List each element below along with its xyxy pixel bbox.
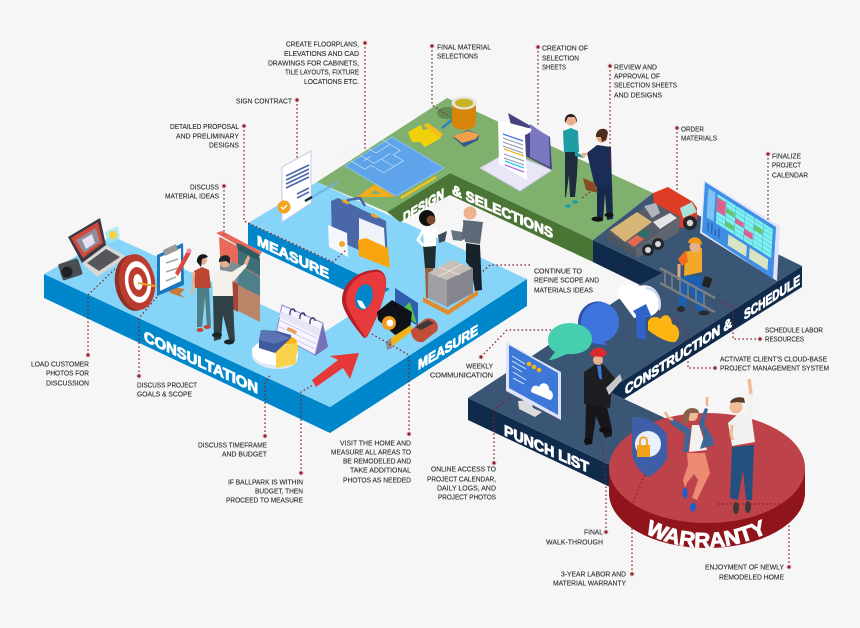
icon: briefcase with folder bbox=[328, 198, 390, 268]
label: review and approval: AND DESIGNS bbox=[614, 90, 662, 100]
people: designer and client bbox=[418, 206, 483, 298]
platform: design and selections bbox=[317, 98, 653, 262]
label: schedule labor bbox=[765, 326, 823, 344]
icon: red arrow bbox=[312, 353, 359, 387]
dotted leader lines bbox=[86, 41, 791, 576]
label: detailed proposal bbox=[170, 122, 239, 150]
label: create floorplans: ELEVATIONS AND CAD bbox=[284, 49, 359, 58]
label: weekly communication bbox=[430, 362, 493, 380]
icon: cloud with upload arrow bbox=[617, 284, 679, 342]
label: online access: PROJECT CALENDAR, bbox=[427, 474, 496, 484]
label: visit the home bbox=[331, 439, 411, 484]
label: labor and material warranty: 3-YEAR LABOR AND bbox=[561, 570, 626, 579]
label: discuss material ideas: MATERIAL IDEAS bbox=[165, 192, 219, 201]
heading: measure (lower): MEASURE bbox=[418, 322, 478, 374]
people: handshake bbox=[563, 114, 614, 222]
label: discuss material ideas: DISCUSS bbox=[190, 183, 219, 192]
people: worker with ladder bbox=[660, 237, 715, 315]
icon: camera, photo and tape measure bbox=[377, 288, 438, 350]
heading: warranty: WARRANTY bbox=[648, 519, 763, 548]
label: load customer photos: PHOTOS FOR bbox=[46, 369, 89, 378]
label: schedule labor: RESOURCES bbox=[765, 335, 804, 344]
label: visit the home: MEASURE ALL AREAS TO bbox=[331, 448, 411, 457]
label: continue to refine: MATERIALS IDEAS bbox=[534, 286, 593, 294]
icon: delivery truck bbox=[607, 187, 697, 258]
label: create floorplans: DRAWINGS FOR CABINETS, bbox=[268, 58, 359, 68]
people: couple choosing materials bbox=[192, 231, 262, 344]
label: activate cloud system: PROJECT MANAGEMENT SYSTEM bbox=[720, 364, 829, 373]
label: finalize calendar: FINALIZE bbox=[772, 152, 801, 161]
label: discuss timeframe: AND BUDGET bbox=[222, 450, 267, 459]
icon: contract with signature bbox=[278, 151, 338, 222]
label: online access bbox=[427, 465, 496, 502]
label: order materials: ORDER bbox=[681, 125, 704, 134]
icon: clipboard with pencil bbox=[157, 243, 192, 296]
platform: construction and punch list bbox=[468, 193, 802, 487]
material board bbox=[216, 231, 262, 322]
people: happy couple bbox=[665, 379, 755, 514]
label: weekly communication: WEEKLY bbox=[466, 362, 493, 371]
heading: punch list: PUNCH LIST bbox=[504, 423, 589, 477]
label: review and approval: SELECTION SHEETS bbox=[614, 81, 677, 90]
label: review and approval: APPROVAL OF bbox=[614, 72, 660, 81]
label: online access: DAILY LOGS, AND bbox=[437, 484, 496, 493]
icon: target with arrow bbox=[111, 252, 185, 313]
icon: stacked boxes on pallet bbox=[423, 260, 478, 315]
icon: laptop with camera bbox=[58, 218, 127, 281]
label: enjoyment: REMODELED HOME bbox=[719, 572, 784, 582]
label: creation of selection sheets: SHEETS bbox=[542, 63, 566, 72]
label: visit the home: TAKE ADDITIONAL bbox=[350, 466, 411, 475]
label: schedule labor: SCHEDULE LABOR bbox=[765, 326, 823, 335]
label: load customer photos: LOAD CUSTOMER bbox=[31, 360, 89, 369]
label: final walk-through bbox=[546, 528, 603, 546]
label: labor and material warranty: MATERIAL WARRANTY bbox=[553, 579, 626, 588]
heading: and selections: & SELECTIONS bbox=[452, 183, 553, 242]
label: enjoyment bbox=[705, 563, 784, 582]
icon: calendar bbox=[276, 305, 328, 356]
label: detailed proposal: DETAILED PROPOSAL bbox=[170, 122, 239, 131]
label: visit the home: BE REMODELED AND bbox=[343, 457, 411, 466]
heading: schedule: SCHEDULE bbox=[744, 272, 800, 324]
label: discuss timeframe: DISCUSS TIMEFRAME bbox=[198, 441, 267, 450]
label: load customer photos bbox=[31, 360, 89, 388]
icon: shield with padlock bbox=[632, 417, 667, 477]
label: order materials bbox=[681, 125, 717, 143]
label: ballpark: PROCEED TO MEASURE bbox=[226, 496, 303, 505]
label: create floorplans: LOCATIONS ETC. bbox=[304, 77, 359, 86]
label: final material selections bbox=[437, 43, 491, 61]
platform: consultation and measure bbox=[44, 182, 527, 433]
icon: location pin bbox=[342, 270, 386, 338]
chart icon: 3D pie bbox=[252, 330, 298, 369]
label: review and approval bbox=[614, 63, 677, 100]
label: activate cloud system: ACTIVATE CLIENT'S CLOUD-BASE bbox=[720, 355, 827, 364]
label: online access: ONLINE ACCESS TO bbox=[431, 465, 496, 474]
label: final material selections: SELECTIONS bbox=[437, 52, 478, 61]
label: activate cloud system bbox=[720, 355, 829, 373]
label: final walk-through: WALK-THROUGH bbox=[546, 538, 603, 546]
label: create floorplans: TILE LAYOUTS, FIXTURE bbox=[285, 68, 359, 77]
label: detailed proposal: DESIGNS bbox=[209, 141, 239, 150]
label: creation of selection sheets: CREATION OF bbox=[542, 44, 588, 53]
label: create floorplans bbox=[268, 40, 359, 86]
label: finalize calendar bbox=[772, 152, 808, 180]
heading: measure (upper): MEASURE bbox=[257, 234, 329, 283]
label: discuss project goals: DISCUSS PROJECT bbox=[137, 381, 197, 390]
heading: construction and: CONSTRUCTION & bbox=[625, 315, 732, 399]
label: sign contract: SIGN CONTRACT bbox=[236, 97, 292, 106]
label: discuss material ideas bbox=[165, 183, 219, 201]
platform: warranty disc bbox=[609, 413, 805, 548]
label: ballpark bbox=[226, 478, 303, 505]
label: enjoyment: ENJOYMENT OF NEWLY bbox=[705, 563, 784, 572]
label: online access: PROJECT PHOTOS bbox=[438, 493, 496, 502]
label: load customer photos: DISCUSSION bbox=[46, 378, 89, 388]
icon: laptop with selection sheet bbox=[480, 113, 552, 191]
label: order materials: MATERIALS bbox=[681, 134, 717, 143]
label: final walk-through: FINAL bbox=[584, 528, 603, 537]
label: visit the home: PHOTOS AS NEEDED bbox=[343, 476, 411, 484]
label: continue to refine bbox=[534, 267, 599, 294]
label: creation of selection sheets bbox=[542, 44, 588, 72]
label: labor and material warranty bbox=[553, 570, 626, 588]
icon: project calendar screen bbox=[700, 180, 780, 281]
label: continue to refine: REFINE SCOPE AND bbox=[534, 276, 599, 285]
heading: design: DESIGN bbox=[403, 186, 444, 227]
label: review and approval: REVIEW AND bbox=[614, 63, 657, 72]
label: create floorplans: CREATE FLOORPLANS, bbox=[286, 40, 359, 49]
label: visit the home: VISIT THE HOME AND bbox=[340, 439, 411, 448]
label: weekly communication: COMMUNICATION bbox=[430, 371, 493, 380]
icon: paint can, roller and swatches bbox=[408, 96, 479, 147]
label: discuss project goals: GOALS & SCOPE bbox=[137, 390, 192, 399]
icon: blueprint with ruler and pencil bbox=[342, 135, 444, 198]
label: ballpark: BUDGET, THEN bbox=[255, 487, 303, 496]
people: manager with hard hat bbox=[584, 348, 622, 445]
label: finalize calendar: PROJECT bbox=[772, 161, 801, 170]
label: creation of selection sheets: SELECTION bbox=[542, 54, 579, 62]
label: discuss project goals bbox=[137, 381, 197, 399]
label: final material selections: FINAL MATERIAL bbox=[437, 43, 491, 52]
label: discuss timeframe bbox=[198, 441, 267, 459]
label: ballpark: IF BALLPARK IS WITHIN bbox=[228, 478, 303, 487]
icon: monitor with cloud bbox=[506, 342, 561, 420]
label: finalize calendar: CALENDAR bbox=[772, 170, 808, 180]
label: continue to refine: CONTINUE TO bbox=[534, 267, 582, 276]
heading: consultation: CONSULTATION bbox=[144, 329, 258, 398]
label: detailed proposal: AND PRELIMINARY bbox=[176, 132, 239, 140]
icon: speech bubbles bbox=[548, 301, 619, 360]
